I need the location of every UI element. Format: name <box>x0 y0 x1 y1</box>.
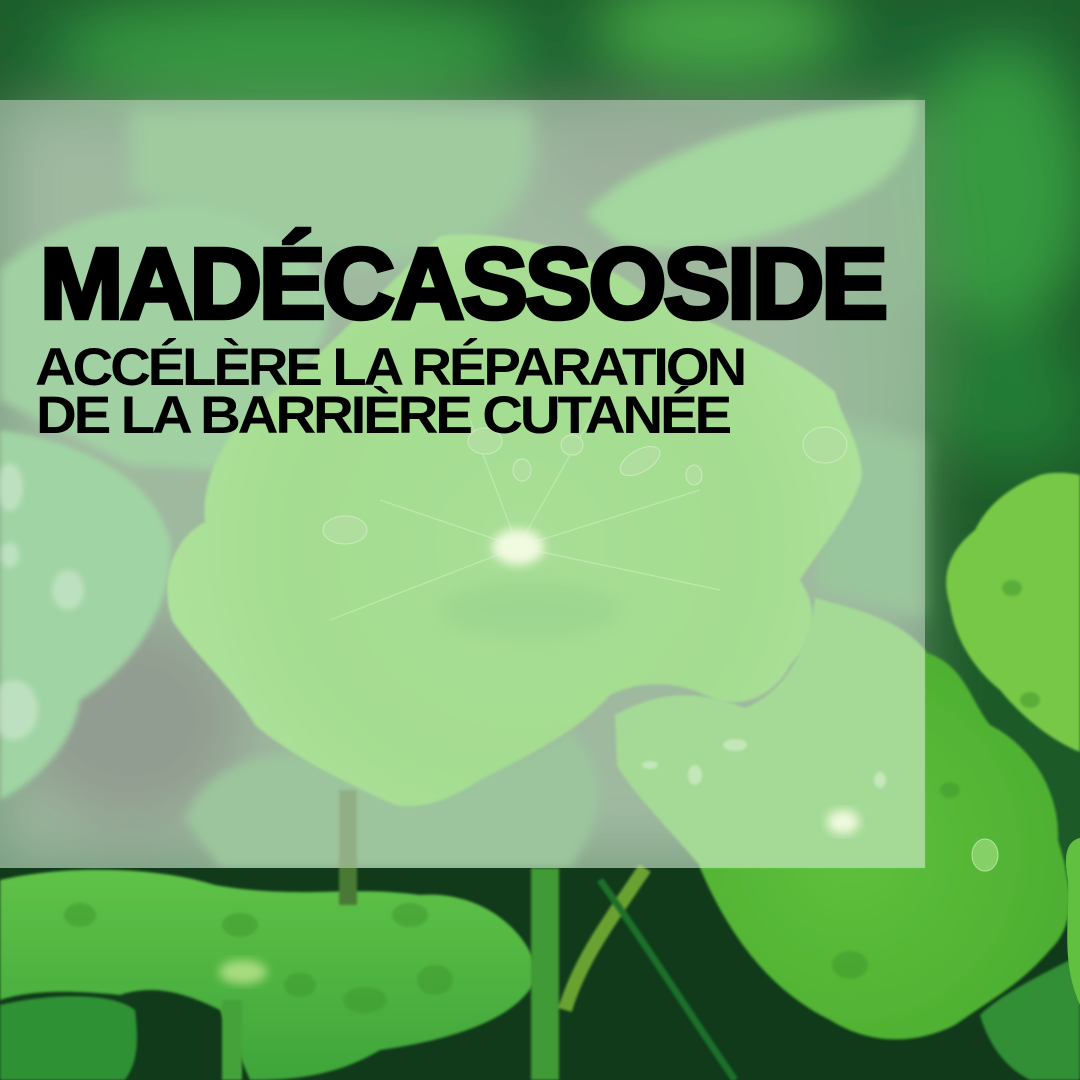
leaf spots <box>64 580 1040 1013</box>
main leaf shading <box>440 580 620 640</box>
drop on right leaf <box>972 839 998 871</box>
bottom right large leaf <box>700 650 1070 1039</box>
subtitle: DE LA BARRIÈRE CUTANÉE <box>36 385 731 445</box>
bottom left small leaf <box>0 996 137 1080</box>
top leaf behind panel <box>130 110 535 264</box>
main leaf water drops <box>323 427 847 544</box>
right edge leaf <box>946 473 1080 752</box>
dark gap below panel <box>0 868 1080 1080</box>
left blurred leaf <box>0 430 170 800</box>
translucent panel <box>0 100 925 868</box>
lower ghost leaf behind panel <box>185 730 600 868</box>
stems <box>232 790 735 1080</box>
subtitle: ACCÉLÈRE LA RÉPARATION <box>35 337 744 397</box>
main leaf <box>167 234 862 806</box>
far right leaf sliver <box>1066 838 1080 1005</box>
left leaf highlights <box>0 463 84 740</box>
upper left leaf behind panel <box>0 206 328 470</box>
right ghost leaf behind panel <box>815 420 925 620</box>
top right leaf behind panel <box>585 100 917 249</box>
subtitle <box>35 337 744 445</box>
small bottom right leaf <box>980 955 1080 1080</box>
leaf over panel edge <box>615 598 925 868</box>
main leaf veins <box>330 420 720 620</box>
bottom left leaf <box>0 870 538 1080</box>
speckles on panel-edge leaf <box>642 739 886 788</box>
title: MADÉCASSOSIDE <box>40 228 885 340</box>
